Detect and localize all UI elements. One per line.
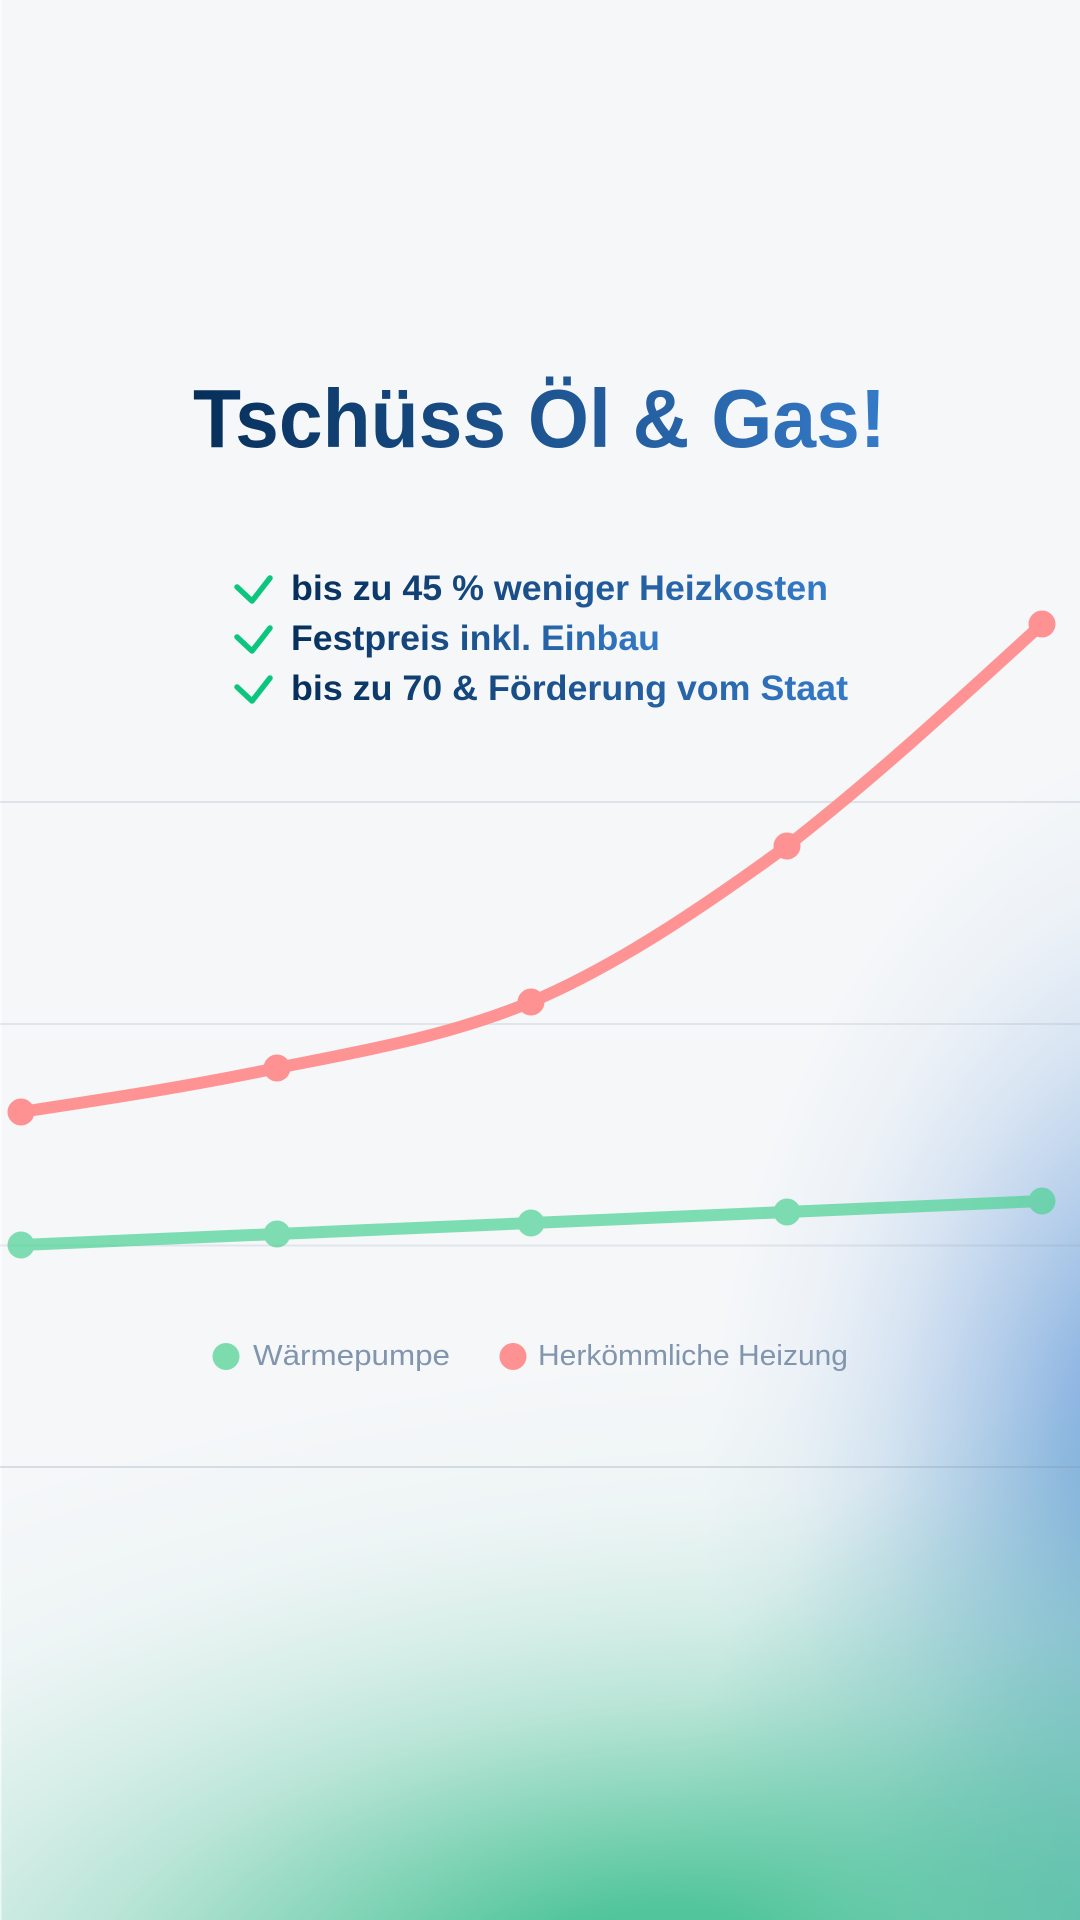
benefit 3: bis zu 70 & Förderung vom Staat	[291, 669, 848, 708]
legend label: Wärmepumpe: Wärmepumpe	[253, 1340, 450, 1372]
icon: check 2	[237, 628, 270, 651]
benefit 2: Festpreis inkl. Einbau	[291, 619, 660, 658]
benefit 1: bis zu 45 % weniger Heizkosten	[291, 569, 828, 608]
legend marker: Herkömmliche Heizung	[500, 1343, 526, 1370]
icon: check 1	[237, 578, 270, 601]
legend	[212, 1340, 848, 1372]
benefits list	[237, 569, 848, 708]
title: Tschüss Öl & Gas!	[193, 372, 886, 465]
icon: check 3	[237, 678, 270, 701]
legend marker: Wärmepumpe	[212, 1343, 240, 1370]
legend label: Herkömmliche Heizung: Herkömmliche Heizung	[538, 1340, 848, 1372]
line chart: Wärmepumpe	[8, 1188, 1056, 1258]
line chart: Herkömmliche Heizung	[8, 610, 1056, 1126]
